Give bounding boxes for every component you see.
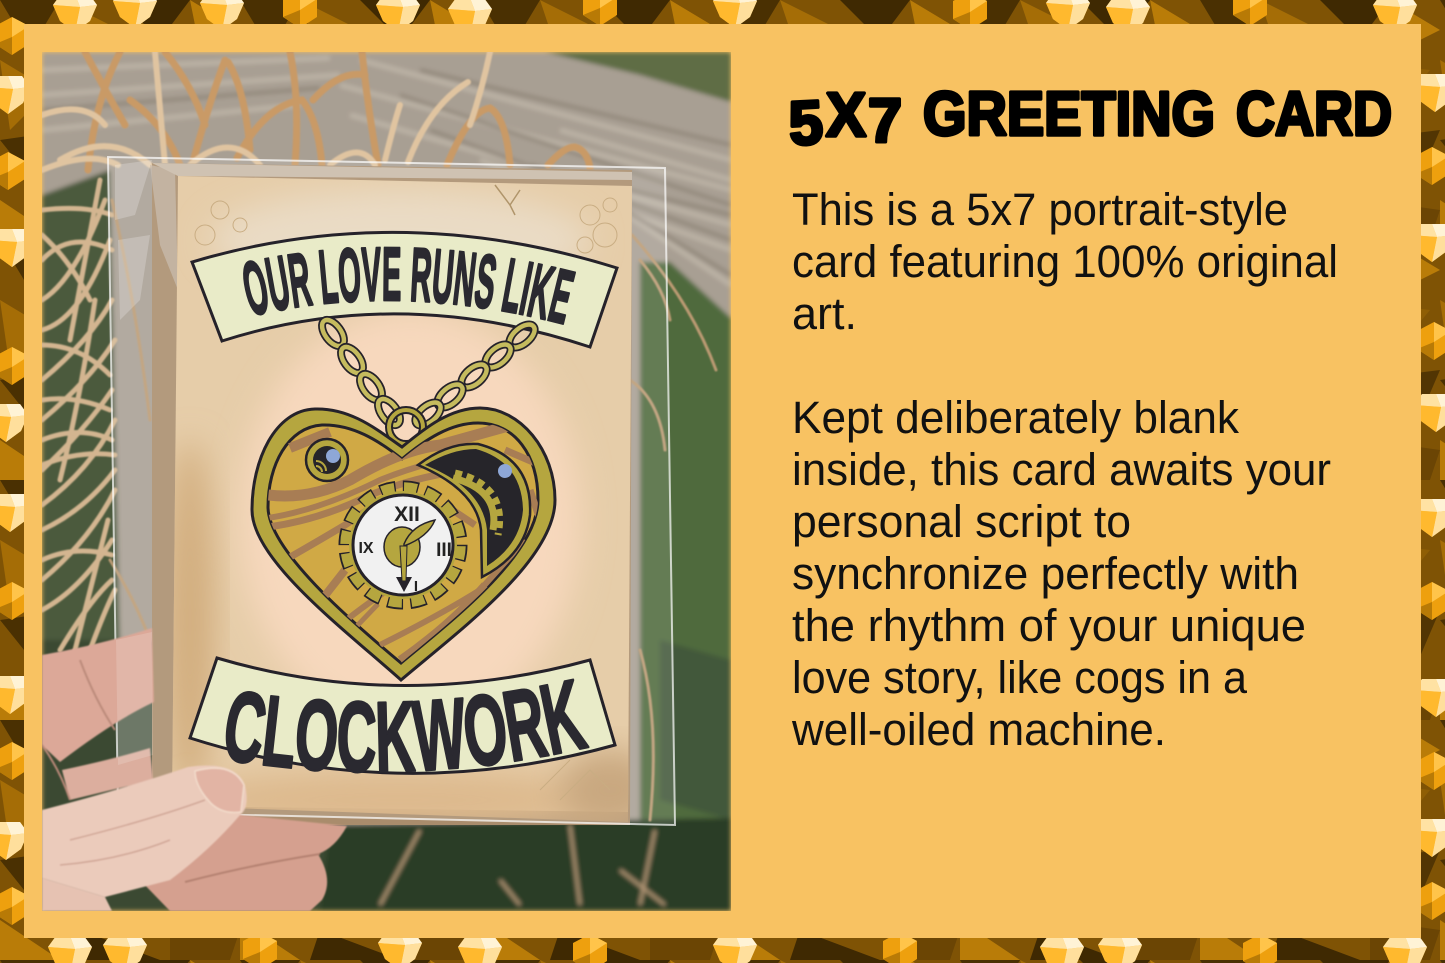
top banner xyxy=(190,230,619,349)
title: X xyxy=(826,81,866,150)
text block: blank inside: Kept deliberately blank xyxy=(792,392,1239,443)
title: 5 xyxy=(787,88,825,159)
text block: card description: This is a 5x7 portrait-style xyxy=(792,184,1288,235)
title: 7 xyxy=(868,87,902,156)
crescent window with gear xyxy=(418,444,530,577)
clock hands xyxy=(384,520,435,592)
kraft envelope xyxy=(152,163,632,825)
text block: blank inside: the rhythm of your unique xyxy=(792,600,1306,651)
banner text: OUR LOVE RUNS LIKE xyxy=(243,246,576,325)
text block: blank inside: well-oiled machine. xyxy=(791,704,1166,755)
text block: blank inside: personal script to xyxy=(792,496,1131,547)
text block: card description xyxy=(792,184,1338,339)
text block: blank inside xyxy=(791,392,1331,755)
banner text: CLOCKWORK xyxy=(226,678,590,774)
heart locket xyxy=(252,408,555,680)
dry pampas grass xyxy=(42,52,716,820)
title xyxy=(787,80,1392,159)
bottom banner xyxy=(188,656,617,775)
sleeve reflection over fingers xyxy=(116,632,153,765)
clock: I xyxy=(414,578,418,595)
photo of greeting card xyxy=(42,52,731,911)
photo background: deck and grass xyxy=(42,52,731,911)
hand holding card xyxy=(42,628,347,911)
text block: blank inside: synchronize perfectly with xyxy=(792,548,1299,599)
clock: III xyxy=(436,540,452,561)
clock: IX xyxy=(358,540,374,557)
title: CARD xyxy=(1236,80,1392,149)
plastic sleeve xyxy=(108,157,675,825)
clock numerals: XII xyxy=(394,503,420,526)
text block: blank inside: inside, this card awaits your xyxy=(792,444,1331,495)
text block: blank inside: love story, like cogs in a xyxy=(792,652,1248,703)
clock xyxy=(345,487,461,603)
greeting card xyxy=(172,176,632,822)
small porthole xyxy=(306,439,348,481)
wood grain xyxy=(268,420,540,660)
text block: card description: art. xyxy=(792,288,857,339)
text block: card description: card featuring 100% original xyxy=(792,236,1338,287)
title: GREETING xyxy=(923,80,1215,149)
chain xyxy=(318,316,539,444)
